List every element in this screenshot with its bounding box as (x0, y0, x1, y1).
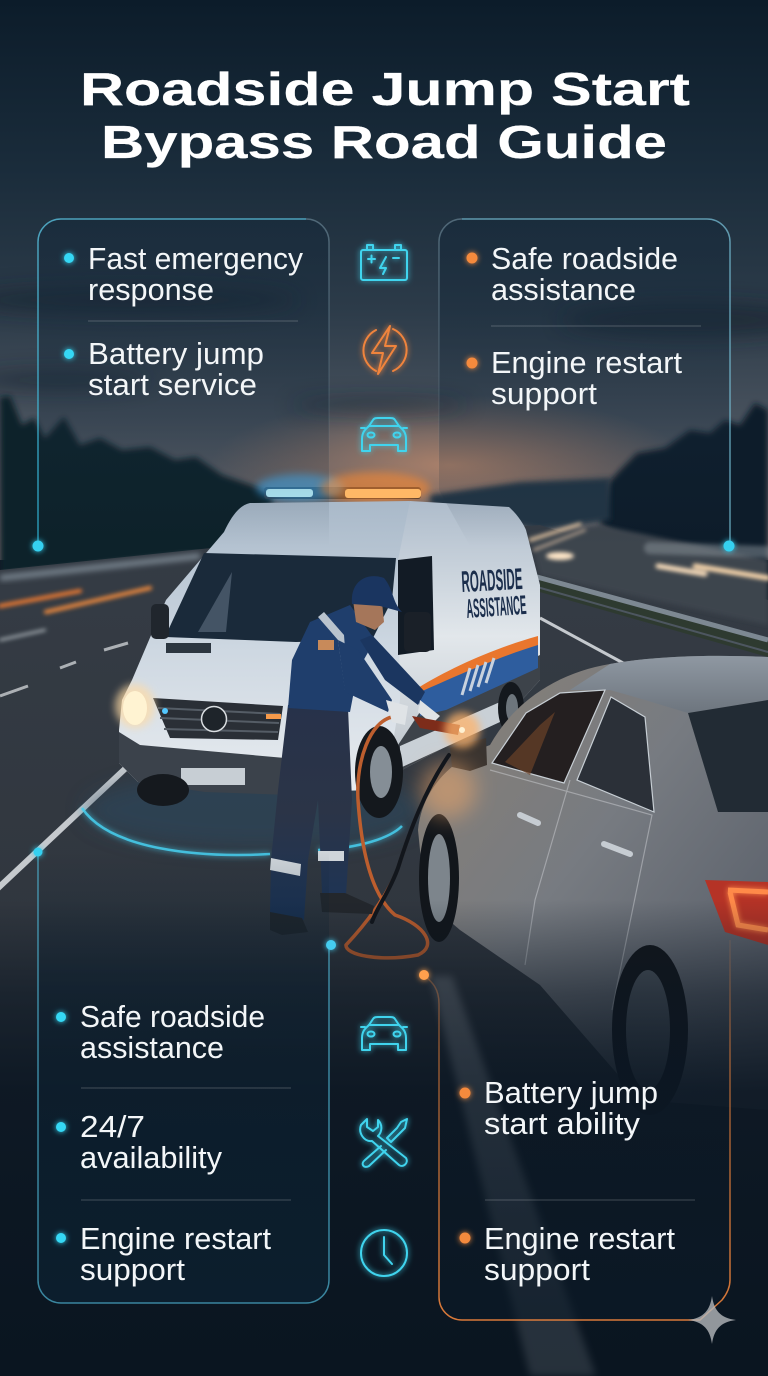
roof light bar (256, 472, 430, 504)
reflective ankle bands (270, 851, 344, 876)
near arm (338, 640, 392, 712)
item: 24/7 availability: availability (80, 1140, 222, 1175)
item: safe roadside assistance: assistance (80, 1030, 224, 1065)
item: engine restart support: support (80, 1252, 185, 1287)
background: clouds (0, 286, 768, 412)
right roadside verge (540, 575, 768, 657)
item: battery jump start ability (460, 1075, 658, 1141)
door seam lines (490, 770, 652, 1010)
car wing mirror (450, 738, 487, 771)
node dot (32, 540, 44, 552)
mirror glow on body (420, 762, 476, 818)
infographic canvas: ASSISTANCE (465, 590, 527, 624)
item: 24/7 availability (56, 1109, 222, 1175)
van side panel (370, 501, 540, 772)
lower sill (398, 655, 540, 772)
item: battery jump start service: Battery jump (88, 336, 264, 371)
van ground shadow (85, 772, 425, 848)
orange stripe (418, 636, 538, 692)
panel background (38, 852, 329, 1303)
sedan car (418, 656, 768, 1115)
tail light (705, 880, 768, 945)
car roof highlight (570, 656, 768, 713)
item: engine restart support: support (491, 376, 597, 411)
panel left edge (439, 219, 462, 480)
van lettering (461, 563, 527, 624)
item: engine restart support: Engine restart (484, 1221, 675, 1256)
guard rail right (537, 577, 768, 652)
reflective shoulder stripes (318, 612, 348, 690)
item: battery jump start ability: start ability (484, 1106, 641, 1141)
torso (288, 605, 375, 712)
headlight (115, 684, 155, 728)
panel background (439, 1000, 730, 1320)
panel border (38, 219, 306, 546)
cable clamp with spark (412, 712, 480, 748)
item: engine restart support (460, 1221, 675, 1287)
background: right tree line (600, 403, 768, 575)
window sunset reflection (505, 712, 555, 775)
panel border (462, 219, 730, 546)
guard rail left (0, 556, 200, 578)
node dot (419, 970, 429, 980)
panel: bottom right services (419, 940, 730, 1320)
lane stripe on dark road (430, 976, 596, 1376)
panel border (38, 852, 329, 1303)
white sill strip (400, 702, 500, 768)
front bumper (119, 732, 290, 795)
background: horizon glow (210, 395, 690, 535)
background: distant hills (430, 478, 610, 530)
chest badge (318, 640, 334, 650)
left wing mirror (151, 604, 169, 639)
panel: top left services (32, 219, 329, 552)
item: fast emergency response: response (88, 272, 214, 307)
background: left tree line (0, 396, 285, 578)
item: safe roadside assistance (466, 241, 678, 307)
windshield reflection (198, 572, 232, 632)
icon: battery (361, 245, 407, 280)
number plate (181, 768, 245, 785)
item: battery jump start service: start service (88, 367, 257, 402)
item: engine restart support: support (484, 1252, 590, 1287)
gloved hands (386, 700, 440, 725)
van with roof light bar (115, 472, 540, 818)
stripe orange and blue (418, 637, 538, 716)
side window and door (398, 556, 434, 655)
background: dusk sky (0, 0, 768, 560)
item: safe roadside assistance: assistance (491, 272, 636, 307)
panel: top right services (439, 219, 734, 552)
van hood vent (166, 643, 211, 653)
front door window (492, 690, 605, 783)
mechanic in navy overalls (270, 576, 480, 935)
panel: bottom left services (34, 848, 336, 1303)
item: battery jump start service (64, 336, 264, 402)
icon: wrench and screwdriver (360, 1119, 407, 1167)
panel border (424, 940, 730, 1320)
blurred traffic light streaks (0, 524, 768, 640)
node dot (724, 540, 734, 552)
road markings (0, 618, 625, 890)
item: fast emergency response (64, 241, 303, 307)
item: fast emergency response: Fast emergency (88, 241, 303, 276)
title: Roadside Jump Start (80, 63, 690, 115)
panel right edge (306, 219, 329, 490)
icon: lightning bolt in circle (363, 326, 407, 374)
icon: sparkle watermark (688, 1296, 736, 1344)
windshield (165, 553, 396, 642)
icon: car front bottom (361, 1017, 407, 1050)
far lanes on the right (530, 525, 768, 625)
front wheel of car (419, 814, 459, 942)
van side wheel front (355, 726, 403, 818)
node dot right (326, 940, 336, 950)
right wing mirror (404, 612, 431, 652)
item: engine restart support: Engine restart (80, 1221, 271, 1256)
item: battery jump start ability: Battery jump (484, 1075, 658, 1110)
infographic canvas: ROADSIDE (461, 563, 523, 599)
cap (352, 576, 402, 612)
face (353, 600, 384, 630)
white hatch marks (462, 658, 494, 695)
item: engine restart support (56, 1221, 271, 1287)
item: safe roadside assistance: Safe roadside (491, 241, 678, 276)
node dot left (34, 848, 42, 856)
title (80, 63, 690, 168)
rear door window (577, 697, 654, 812)
rear window (688, 700, 768, 812)
icon: car front top (361, 418, 407, 451)
far arm (360, 635, 425, 705)
item: safe roadside assistance: Safe roadside (80, 999, 265, 1034)
road surface (0, 525, 768, 1376)
front wheels (137, 774, 189, 806)
icon: clock (361, 1230, 407, 1276)
panel background (38, 219, 329, 546)
item: safe roadside assistance (56, 999, 265, 1065)
car body (418, 656, 768, 1110)
item: engine restart support: Engine restart (491, 345, 682, 380)
panel background (439, 219, 730, 546)
rear wheel of car (612, 945, 688, 1115)
legs (270, 705, 352, 920)
bottom darkness fade (0, 900, 768, 1376)
jumper cables (346, 717, 449, 958)
item: engine restart support (466, 345, 682, 411)
van front body (119, 501, 410, 792)
title: Bypass Road Guide (101, 116, 667, 168)
ground glow ring (82, 808, 402, 855)
door handles (520, 815, 630, 854)
van rear wheel (498, 682, 524, 734)
item: 24/7 availability: 24/7 (80, 1109, 145, 1144)
grille (153, 698, 283, 740)
boots (270, 893, 374, 935)
